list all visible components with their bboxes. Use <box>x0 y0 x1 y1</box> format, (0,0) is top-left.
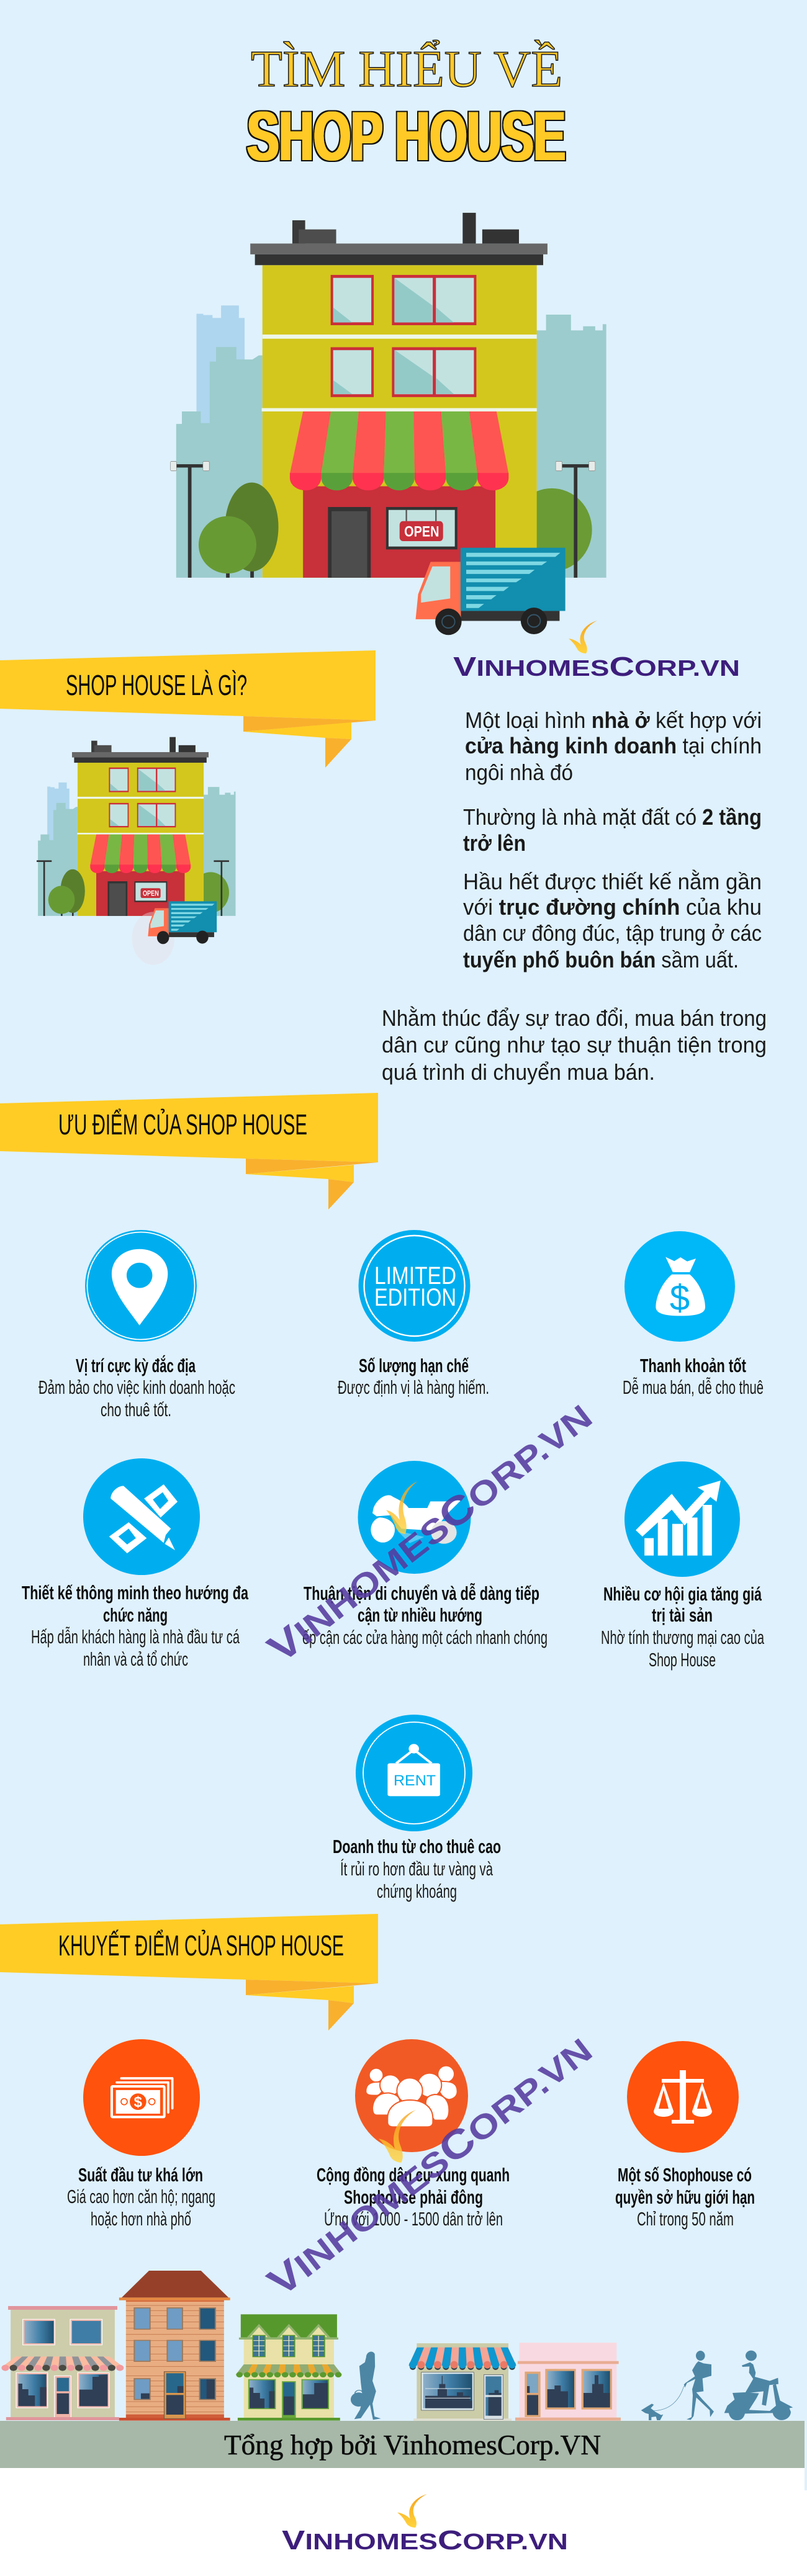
description: Được định vị là hàng hiếm. <box>338 1376 489 1398</box>
description: cho thuê tốt. <box>101 1399 171 1420</box>
banner: Shop House là gì <box>0 650 376 768</box>
item: limited ownership <box>615 2041 755 2230</box>
footer <box>0 2468 807 2576</box>
description: ếp cận các cửa hàng một cách nhanh chóng <box>302 1627 548 1648</box>
icon: money bag <box>624 1231 735 1342</box>
item: value growth <box>601 1461 764 1671</box>
label: Số lượng hạn chế <box>359 1355 469 1376</box>
icon: group of people <box>355 2039 468 2152</box>
icon: limited edition badge: LIMITED <box>374 1262 456 1290</box>
logo: VinhomesCorp top <box>453 621 740 682</box>
building E <box>515 2343 621 2421</box>
label <box>615 2164 755 2208</box>
label: trị tài sản <box>652 1604 713 1626</box>
description <box>340 1858 493 1902</box>
banner heading: ƯU ĐIỂM CỦA SHOP HOUSE <box>58 1108 307 1141</box>
paragraph 1: Một loại hình nhà ở kết hợp với <box>465 707 762 733</box>
label: Vị trí cực kỳ đắc địa <box>76 1354 196 1376</box>
description <box>38 1376 235 1420</box>
item: rental revenue <box>333 1715 501 1902</box>
item: convenience <box>302 1461 548 1648</box>
paragraph 1: ngôi nhà đó <box>465 760 573 785</box>
description: Đảm bảo cho việc kinh doanh hoặc <box>38 1376 235 1398</box>
paragraph 3: dân cư đông đúc, tập trung ở các <box>463 920 762 946</box>
paragraph 2 <box>463 804 762 856</box>
watermark 1 <box>259 1393 600 1671</box>
item: limited edition <box>338 1230 489 1398</box>
street scene: left group <box>1 2271 381 2421</box>
icon: limited edition badge: EDITION <box>374 1284 456 1311</box>
watermark text: VINHOMESCORP.VN <box>259 1393 600 1671</box>
label: cận từ nhiều hướng <box>358 1604 482 1626</box>
icon: money bag: $ <box>670 1278 690 1318</box>
description: hoặc hơn nhà phố <box>91 2208 191 2230</box>
label: Suất đầu tư khá lớn <box>78 2164 203 2186</box>
paragraph 2: Thường là nhà mặt đất có 2 tầng <box>463 804 762 830</box>
description: Ứng với 1000 - 1500 dân trở lên <box>324 2208 503 2230</box>
icon: motorbike <box>358 1461 471 1574</box>
description: Hấp dẫn khách hàng là nhà đầu tư cá <box>31 1626 240 1648</box>
description <box>67 2186 215 2230</box>
icon: rent sign <box>356 1715 472 1831</box>
paragraph 4: dân cư cũng như tạo sự thuận tiện trong <box>382 1032 767 1057</box>
label: Cộng đồng dân cư xung quanh <box>317 2164 510 2186</box>
label: Thiết kế thông minh theo hướng đa <box>22 1582 249 1604</box>
building C <box>236 2314 342 2421</box>
paragraph 3: Hầu hết được thiết kế nằm gần <box>463 869 762 894</box>
paragraph 1: cửa hàng kinh doanh tại chính <box>465 733 762 758</box>
banner heading: KHUYẾT ĐIỂM CỦA SHOP HOUSE <box>58 1929 344 1962</box>
banner: Khuyết điểm <box>0 1914 378 2031</box>
silhouette: woman with bag <box>351 2351 381 2420</box>
ground band with credit <box>0 2421 805 2468</box>
icon: pencil and ruler <box>83 1458 200 1575</box>
description <box>601 1627 764 1671</box>
paragraph 4: Nhằm thúc đẩy sự trao đổi, mua bán trong <box>382 1005 767 1031</box>
icon: rising chart <box>624 1461 740 1577</box>
description: Shop House <box>649 1649 716 1671</box>
icon: banknotes <box>83 2039 200 2156</box>
watermark text: VINHOMESCORP.VN <box>259 2027 600 2305</box>
title line 2: SHOP HOUSE <box>247 97 566 175</box>
item: community <box>317 2039 510 2230</box>
item: location <box>38 1230 235 1420</box>
label: Doanh thu từ cho thuê cao <box>333 1836 501 1857</box>
paragraph 2: trở lên <box>463 830 526 856</box>
title <box>247 39 566 175</box>
paragraph 4 <box>382 1005 767 1085</box>
paragraph 4: quá trình di chuyển mua bán. <box>382 1059 655 1085</box>
description: chứng khoáng <box>377 1880 457 1902</box>
description: Giá cao hơn căn hộ; ngang <box>67 2186 215 2207</box>
label <box>317 2164 510 2208</box>
label: Thanh khoản tốt <box>640 1355 746 1376</box>
label: chức năng <box>103 1604 168 1626</box>
description: nhân và cả tổ chức <box>83 1648 188 1670</box>
label <box>304 1582 539 1626</box>
icon: flame <box>397 2494 427 2528</box>
icon: map pin <box>85 1230 197 1342</box>
logo wordmark: VINHOMES CORP.VN <box>453 652 740 682</box>
building D <box>408 2343 516 2421</box>
icon: banknotes: $ <box>134 2094 143 2111</box>
item: smart design <box>22 1458 249 1670</box>
item: liquidity <box>623 1231 764 1398</box>
icon: flame <box>569 621 597 653</box>
illustration: main shop house: OPEN <box>404 523 439 540</box>
paragraph 3 <box>463 869 762 972</box>
logo wordmark: VINHOMES CORP.VN <box>282 2525 568 2556</box>
icon: scales <box>627 2041 739 2153</box>
paragraph 1 <box>465 707 762 785</box>
street scene: right group <box>408 2343 621 2421</box>
label: Shophouse phải đông <box>344 2186 483 2208</box>
building B <box>119 2271 230 2421</box>
banner heading: SHOP HOUSE LÀ GÌ? <box>66 669 247 701</box>
paragraph 3: với trục đường chính của khu <box>463 894 762 920</box>
banner: Ưu điểm <box>0 1093 378 1209</box>
title line 1: TÌM HIỂU VỀ <box>251 39 562 98</box>
description: Chỉ trong 50 năm <box>637 2208 734 2230</box>
description: Ít rủi ro hơn đầu tư vàng và <box>340 1858 493 1880</box>
item: high investment <box>67 2039 215 2230</box>
silhouettes: walker with dog and scooter rider <box>641 2351 793 2420</box>
paragraph 3: tuyến phố buôn bán sầm uất. <box>463 947 739 972</box>
icon: rent sign: RENT <box>394 1772 436 1789</box>
credit text: Tổng hợp bởi VinhomesCorp.VN <box>224 2429 601 2461</box>
text block: definition <box>382 707 767 1085</box>
label <box>603 1583 762 1626</box>
description <box>31 1626 240 1670</box>
icon: limited edition badge <box>359 1230 471 1342</box>
illustration: small shop house: OPEN <box>143 890 159 898</box>
label: Thuận tiện di chuyển và dễ dàng tiếp <box>304 1582 539 1604</box>
watermark 2 <box>259 2027 600 2305</box>
illustration: small shop house <box>37 737 236 965</box>
label <box>22 1582 249 1626</box>
illustration: main shop house <box>171 213 606 635</box>
building A <box>1 2306 124 2420</box>
